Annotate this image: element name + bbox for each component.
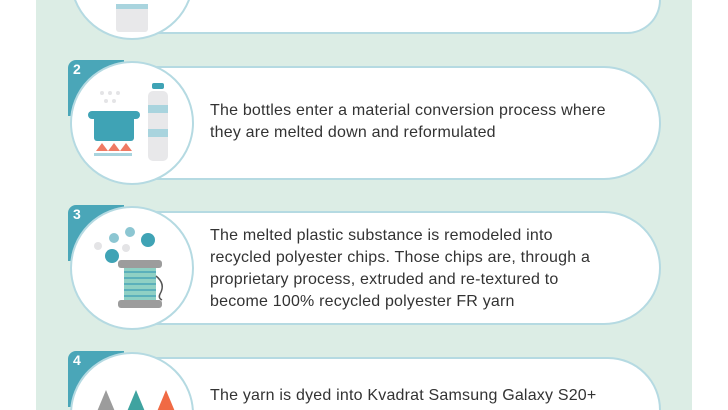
step 2: [68, 60, 661, 185]
circle 1: [74, 0, 190, 40]
pill 4: [140, 357, 661, 410]
text 3: become 100% recycled polyester FR yarn: [210, 293, 515, 310]
step 4: [68, 351, 661, 410]
circle 2 with pot and bottle icon: [70, 61, 194, 185]
text 2: The bottles enter a material conversion process where: [210, 102, 606, 119]
tag 2: [68, 60, 124, 116]
pill 3: [140, 211, 661, 325]
text 2: they are melted down and reformulated: [210, 124, 496, 141]
pill 2: [140, 66, 661, 180]
tag 3: 3: [73, 206, 81, 222]
tag 3: [68, 205, 124, 261]
tag 4: [68, 351, 124, 407]
text 3: [210, 227, 590, 310]
text 3: proprietary process, extruded and re-textured to: [210, 271, 558, 288]
text 2: [210, 102, 606, 141]
pill 1: [140, 0, 661, 34]
circle 4 with cone icons: [70, 352, 194, 410]
step 1 (partial): [74, 0, 661, 40]
tag 2: 2: [73, 61, 81, 77]
text 3: recycled polyester chips. Those chips are, through a: [210, 249, 590, 266]
tag 4: 4: [73, 352, 81, 368]
step 3: [68, 205, 661, 330]
text 3: The melted plastic substance is remodeled into: [210, 227, 553, 244]
text 4: The yarn is dyed into Kvadrat Samsung Galaxy S20+: [210, 387, 596, 404]
circle 3 with spool icon: [70, 206, 194, 330]
